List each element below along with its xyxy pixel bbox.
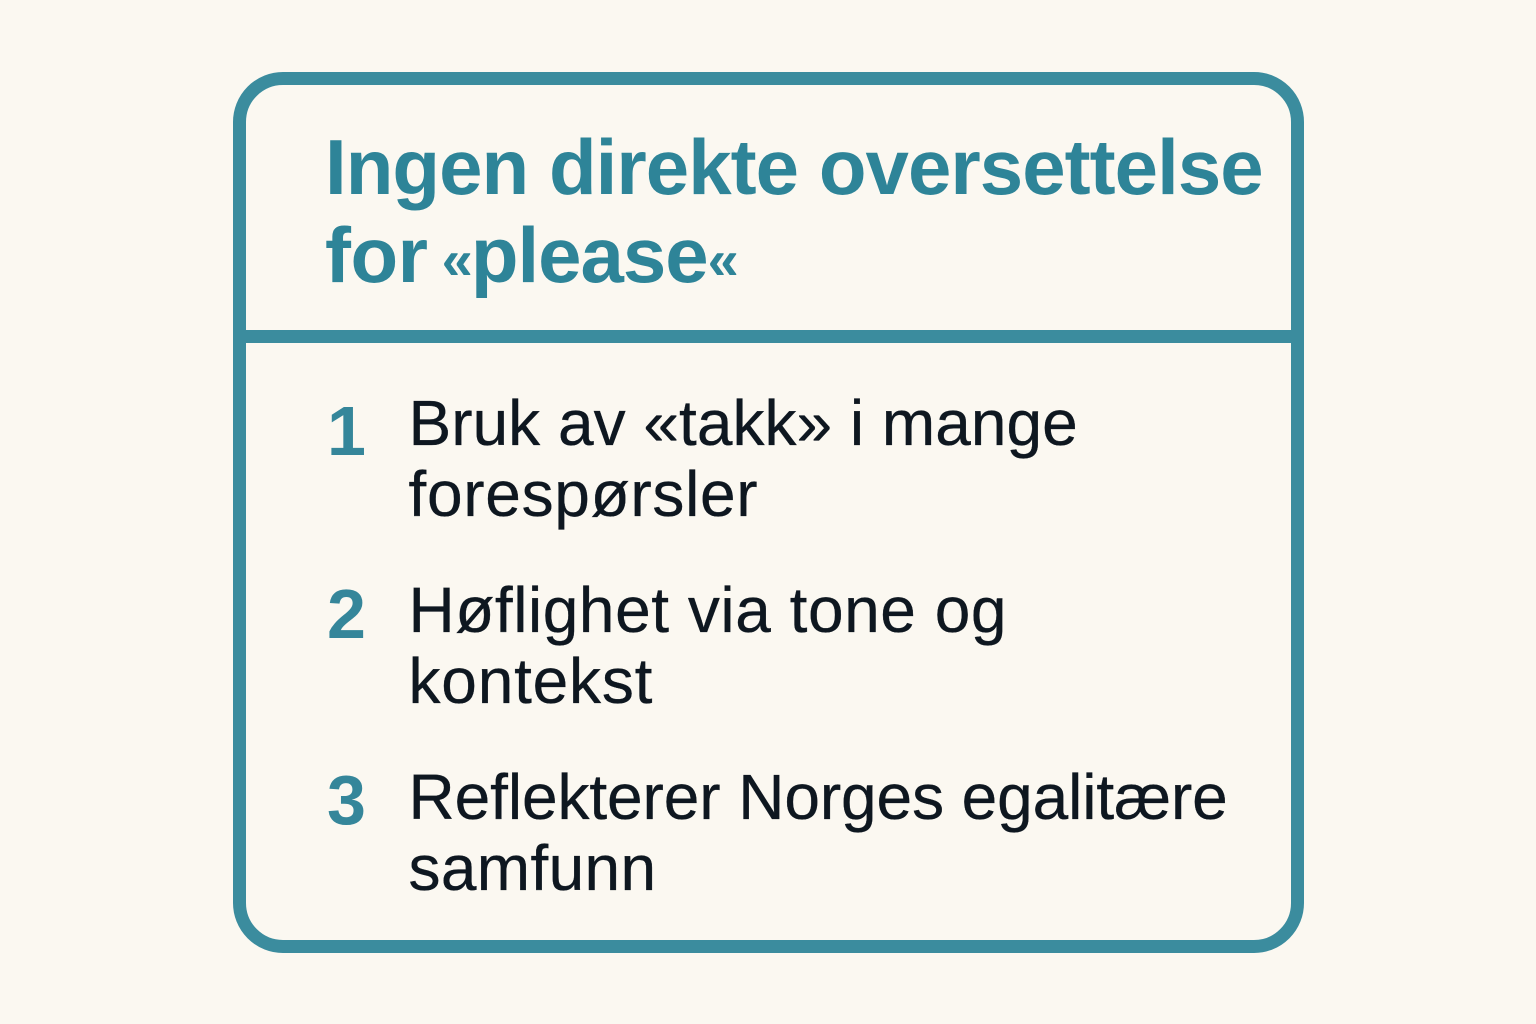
list item 2 text: kontekst — [408, 645, 653, 717]
list item 1 text: Bruk av «takk» i mange — [408, 387, 1078, 459]
list item 2 text: Høflighet via tone og — [408, 574, 1007, 646]
list item 2 text — [408, 574, 1007, 717]
panel: card frame — [233, 72, 1304, 953]
title: Ingen direkte oversettelse — [325, 123, 1263, 211]
number 2: 2 — [327, 575, 366, 653]
divider under heading — [233, 330, 1304, 343]
list item 3 text: samfunn — [408, 832, 656, 904]
list item 3 text: Reflekterer Norges egalitære — [408, 761, 1228, 833]
list item 1 text — [408, 387, 1078, 530]
title — [325, 123, 1263, 299]
number 3: 3 — [327, 761, 366, 839]
number 1: 1 — [327, 392, 366, 470]
title: for «please« — [325, 211, 737, 299]
list item 1 text: forespørsler — [408, 458, 758, 530]
list item 3 text — [408, 761, 1228, 904]
